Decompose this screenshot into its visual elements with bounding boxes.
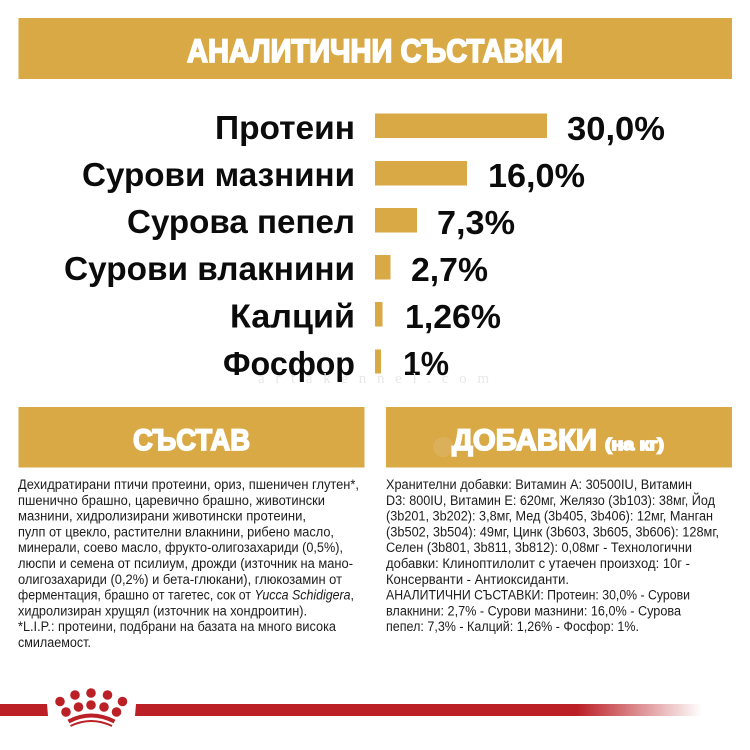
row: protein: Протеин: [215, 109, 355, 146]
row: crude ash: Сурова пепел: [127, 203, 355, 240]
row: calcium: 1,26%: [405, 298, 501, 335]
text block: additives: добавки: Клиноптилолит с утаечен произход: 10г -: [386, 556, 690, 571]
text block: composition: Дехидратирани птичи протеини, ориз, пшеничен глутен*,: [18, 477, 359, 492]
row: protein: [215, 109, 665, 147]
text block: composition: *L.I.P.: протеини, подбрани на базата на много висока: [18, 619, 336, 634]
row: phosphorus: [223, 345, 449, 382]
row: crude fat: Сурови мазнини: [82, 156, 355, 193]
panel: composition heading: СЪСТАВ: [133, 424, 250, 457]
row: phosphorus: 1%: [403, 345, 449, 382]
panel: additives heading: [386, 407, 732, 468]
watermark: artakennel.com: [258, 371, 489, 387]
row: protein: 30,0%: [567, 110, 665, 147]
text block: composition: мазнини, хидролизирани животински протеини,: [18, 509, 306, 524]
row: crude fibre: [64, 250, 488, 288]
text block: additives: пепел: 7,3% - Калций: 1,26% - Фосфор: 1%.: [386, 619, 639, 634]
bar chart: analytical constituents: [64, 109, 665, 382]
row: crude fibre: 2,7%: [411, 251, 488, 288]
text block: composition: олигозахариди (0,2%) и бета-глюкани), глюкозамин от: [18, 572, 342, 587]
row: calcium: [230, 298, 501, 335]
row: crude fat: 16,0%: [488, 157, 585, 194]
text block: additives: [386, 477, 719, 634]
row: crude fibre: Сурови влакнини: [64, 250, 355, 287]
text block: additives: АНАЛИТИЧНИ СЪСТАВКИ: Протеин: 30,0% - Сурови: [386, 588, 690, 603]
row: crude ash: [127, 203, 515, 241]
text block: composition: ферментация, брашно от тагетес, сок от Yucca Schidigera,: [18, 588, 354, 603]
text block: additives: D3: 800IU, Витамин E: 620мг, Желязо (3b103): 38мг, Йод: [386, 493, 715, 508]
row: phosphorus: Фосфор: [223, 345, 355, 382]
text block: composition: люспи и семена от псилиум, дрожди (източник на мано-: [18, 556, 353, 571]
text block: composition: смилаемост.: [18, 635, 91, 650]
text block: additives: (3b502, 3b504): 49мг, Цинк (3b603, 3b605, 3b606): 128мг,: [386, 524, 719, 539]
panel: composition heading: [18, 407, 364, 468]
text block: additives: Селен (3b801, 3b811, 3b812): 0,08мг - Технологични: [386, 540, 692, 555]
panel: additives heading: ДОБАВКИ: [452, 424, 597, 457]
row: calcium: Калций: [230, 298, 355, 334]
title banner: [18, 18, 732, 79]
text block: composition: [18, 477, 359, 650]
row: crude ash: 7,3%: [437, 204, 515, 241]
text block: additives: Консерванти - Антиоксиданти.: [386, 572, 569, 587]
title banner: АНАЛИТИЧНИ СЪСТАВКИ: [187, 33, 563, 69]
red ribbon: right, fading: [135, 704, 702, 716]
text block: composition: хидролизиран хрущял (източник на хондроитин).: [18, 603, 307, 618]
text block: additives: (3b201, 3b202): 3,8мг, Мед (3b405, 3b406): 12мг, Манган: [386, 509, 713, 524]
text block: additives: Хранителни добавки: Витамин A: 30500IU, Витамин: [386, 477, 692, 492]
panel: additives heading: (на кг): [605, 435, 664, 454]
text block: composition: минерали, соево масло, фрукто-олигозахариди (0,5%),: [18, 540, 343, 555]
text block: composition: пшенично брашно, царевично брашно, животински: [18, 493, 325, 508]
text block: composition: пулп от цвекло, растителни влакнини, рибено масло,: [18, 524, 334, 539]
icon: Royal Canin crown: [55, 688, 127, 726]
row: crude fat: [82, 156, 585, 194]
text block: additives: влакнини: 2,7% - Сурови мазнини: 16,0% - Сурова: [386, 603, 681, 618]
red ribbon: left: [0, 704, 48, 716]
